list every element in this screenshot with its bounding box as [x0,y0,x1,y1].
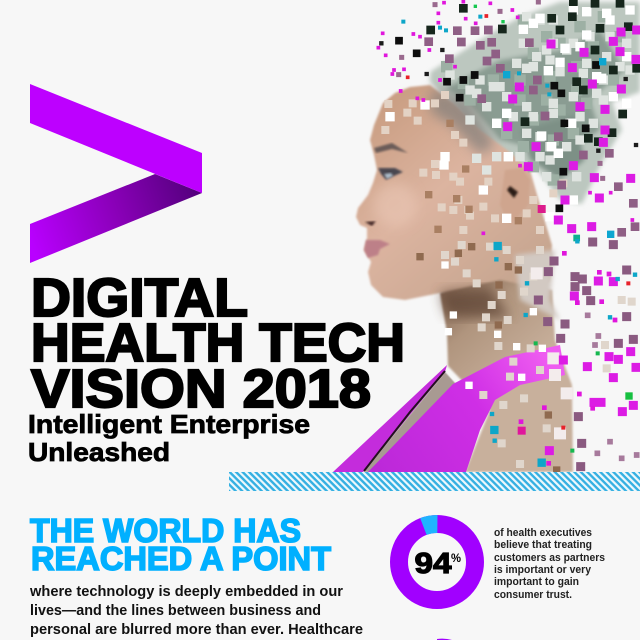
light pixels [537,273,567,433]
neck and chest [440,280,573,472]
beige skin pixels [385,95,563,230]
striped band [229,472,640,491]
small cyan pixels [492,241,635,441]
brown skin pixels [429,123,518,229]
subtitle [28,409,310,467]
hair mass [430,2,640,204]
intro paragraph [29,584,363,638]
under-jaw shadow [440,288,510,318]
strap shadow line [364,371,445,471]
dark green pixels [431,2,637,142]
stat description: consumer trust. [494,589,572,601]
stat description: important to gain [494,576,579,588]
pixel particles, lower region [420,241,637,470]
cyan pixels [403,17,549,94]
large mauve pixels [538,242,633,467]
mauve pixels [429,30,635,232]
small mauve pixels [399,2,603,178]
stat description: believe that treating [494,539,592,551]
black pixels [399,41,596,208]
small black pixels [381,43,636,151]
white pixels [445,265,542,385]
head and face [356,85,552,300]
title: DIGITAL [31,268,248,328]
title: VISION 2018 [31,359,371,419]
teal pixel [567,228,587,248]
intro paragraph: personal are blurred more than ever. Healthcare [30,622,363,638]
subtitle: Unleashed [28,437,170,467]
small mauve pixels [588,315,637,458]
magenta large pixels [508,30,637,229]
intro paragraph: where technology is deeply embedded in our [29,584,343,600]
accenture chevron logo [30,84,202,263]
crimson pixels [530,197,554,221]
section heading: THE WORLD HAS [30,512,301,549]
red pixels [563,283,628,428]
stat description: customers as partners [494,552,605,564]
pixel particles, upper region [378,2,637,238]
chest wedge [363,372,456,472]
mid grey hair pixels [447,17,620,180]
large cyan pixels [507,62,611,234]
white pixels [390,10,630,218]
green pixels [475,6,503,22]
percent sign: % [451,551,461,565]
lips [364,240,390,258]
ear [500,168,530,225]
green pixels [618,385,640,407]
small green pixels [536,343,598,451]
section heading: REACHED A POINT [31,540,331,577]
small magenta pixels [521,253,615,463]
pale cheek [373,183,417,227]
crimson pixel [510,419,534,443]
donut chart: 94% [388,513,486,611]
title [31,268,405,419]
large magenta pixels [549,281,636,451]
donut value: 94 [414,548,452,580]
portrait: woman dissolving into pixels [333,2,640,472]
dress front band [368,345,565,472]
nostril [365,221,376,226]
stat description: of health executives [494,527,592,539]
intro paragraph: lives—and the lines between business and [30,603,321,619]
title: HEALTH TECH [31,313,405,373]
red pixels [408,16,486,77]
eye [378,168,403,180]
brown pixels [420,247,557,470]
section heading [30,512,331,577]
stat description: is important or very [494,564,592,576]
next donut, cropped at the page edge [437,639,452,640]
dress strap [333,365,447,472]
eyebrow [374,143,408,153]
cyan pixels [494,246,542,463]
pale pixels [445,245,632,464]
light grey hair pixels [450,12,630,177]
magenta small pixels [378,2,632,233]
shaded hairline [430,88,495,155]
stat description [494,527,605,601]
subtitle: Intelligent Enterprise [28,409,310,439]
pale dissolving shoulder patch [515,250,560,320]
